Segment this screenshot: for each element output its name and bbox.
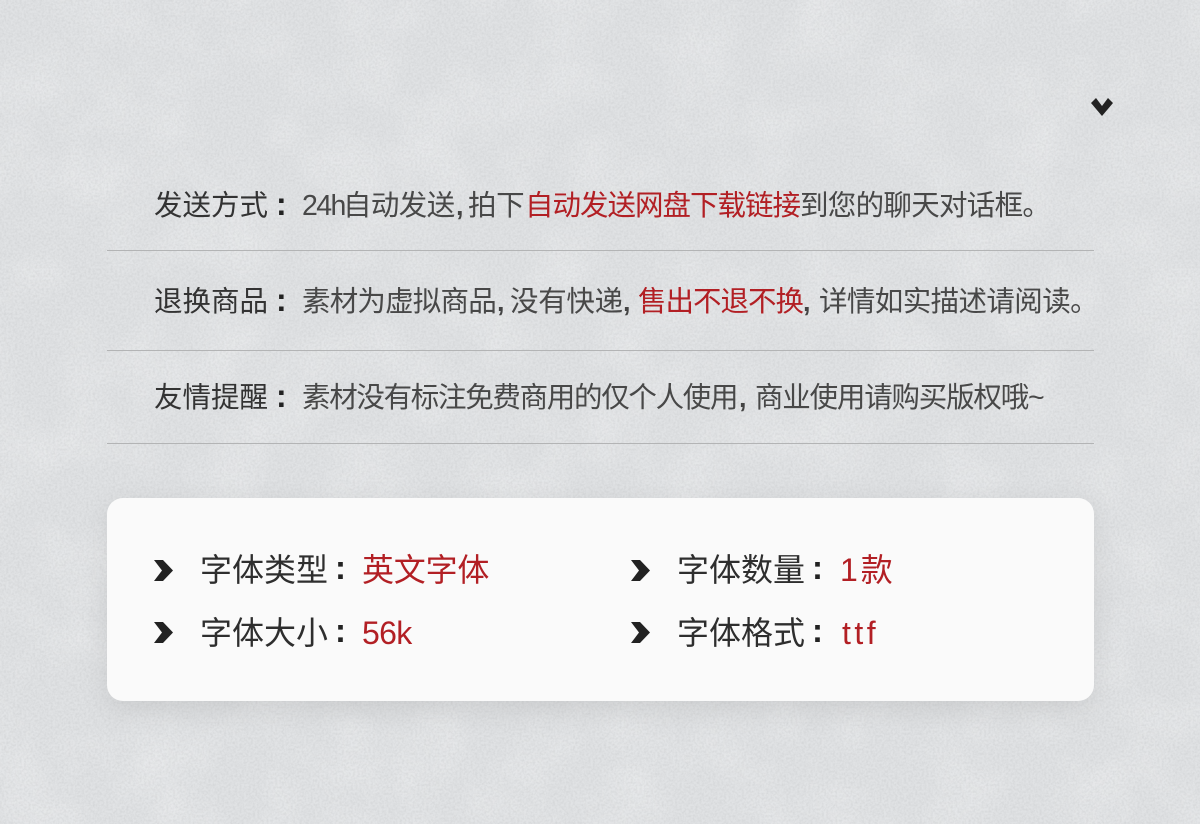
icon: arrow font count xyxy=(631,560,650,581)
panel: font details card xyxy=(107,498,1094,701)
text: returns: , xyxy=(803,287,811,317)
font count: : xyxy=(812,549,823,586)
text: shipping method xyxy=(154,186,1050,222)
font type: 英文字体 xyxy=(362,552,489,588)
font size: 字体大小 xyxy=(200,615,328,651)
text: shipping method: 到您的聊天对话框。 xyxy=(800,190,1050,222)
font format: ttf xyxy=(842,615,879,651)
text: returns: 退换商品 xyxy=(154,286,268,318)
font size: 56k xyxy=(362,615,412,651)
text: reminder: 商业使用请购买版权哦~ xyxy=(755,382,1043,414)
text: returns: 售出不退不换 xyxy=(638,286,803,318)
font count: 字体数量 xyxy=(677,552,805,588)
font type: 字体类型 xyxy=(200,552,328,588)
text: shipping method: 自动发送网盘下载链接 xyxy=(525,190,800,222)
font type xyxy=(200,549,489,588)
font format: 字体格式 xyxy=(677,615,805,651)
text: shipping method: 24h xyxy=(302,190,345,222)
font format xyxy=(677,612,879,651)
text: shipping method: : xyxy=(276,186,287,222)
text: returns: : xyxy=(276,282,287,318)
font count xyxy=(677,549,893,588)
font format: : xyxy=(812,612,823,649)
text: returns xyxy=(154,282,1098,318)
icon: arrow font format xyxy=(631,622,650,643)
icon: arrow font type xyxy=(154,560,173,581)
text: reminder: : xyxy=(276,378,287,414)
text: returns: 没有快递 xyxy=(510,286,623,318)
text: returns: 详情如实描述请阅读。 xyxy=(819,286,1098,318)
text: returns: 素材为虚拟商品 xyxy=(302,286,496,318)
text: shipping method: 自动发送 xyxy=(343,190,455,222)
text: returns: , xyxy=(497,287,505,317)
text: reminder: , xyxy=(739,383,747,413)
font count: 1 款 xyxy=(840,552,893,588)
font size: : xyxy=(335,612,346,649)
icon: chevron down xyxy=(1091,98,1113,116)
text: shipping method: , xyxy=(456,191,464,221)
text: returns: , xyxy=(623,287,631,317)
font type: : xyxy=(335,549,346,586)
icon: arrow font size xyxy=(154,622,173,643)
text: shipping method: 拍下 xyxy=(468,190,524,222)
font size xyxy=(200,612,412,651)
text: reminder xyxy=(154,378,1044,414)
text: reminder: 素材没有标注免费商用的仅个人使用 xyxy=(302,382,737,414)
text: reminder: 友情提醒 xyxy=(154,382,268,414)
text: shipping method: 发送方式 xyxy=(154,190,268,222)
